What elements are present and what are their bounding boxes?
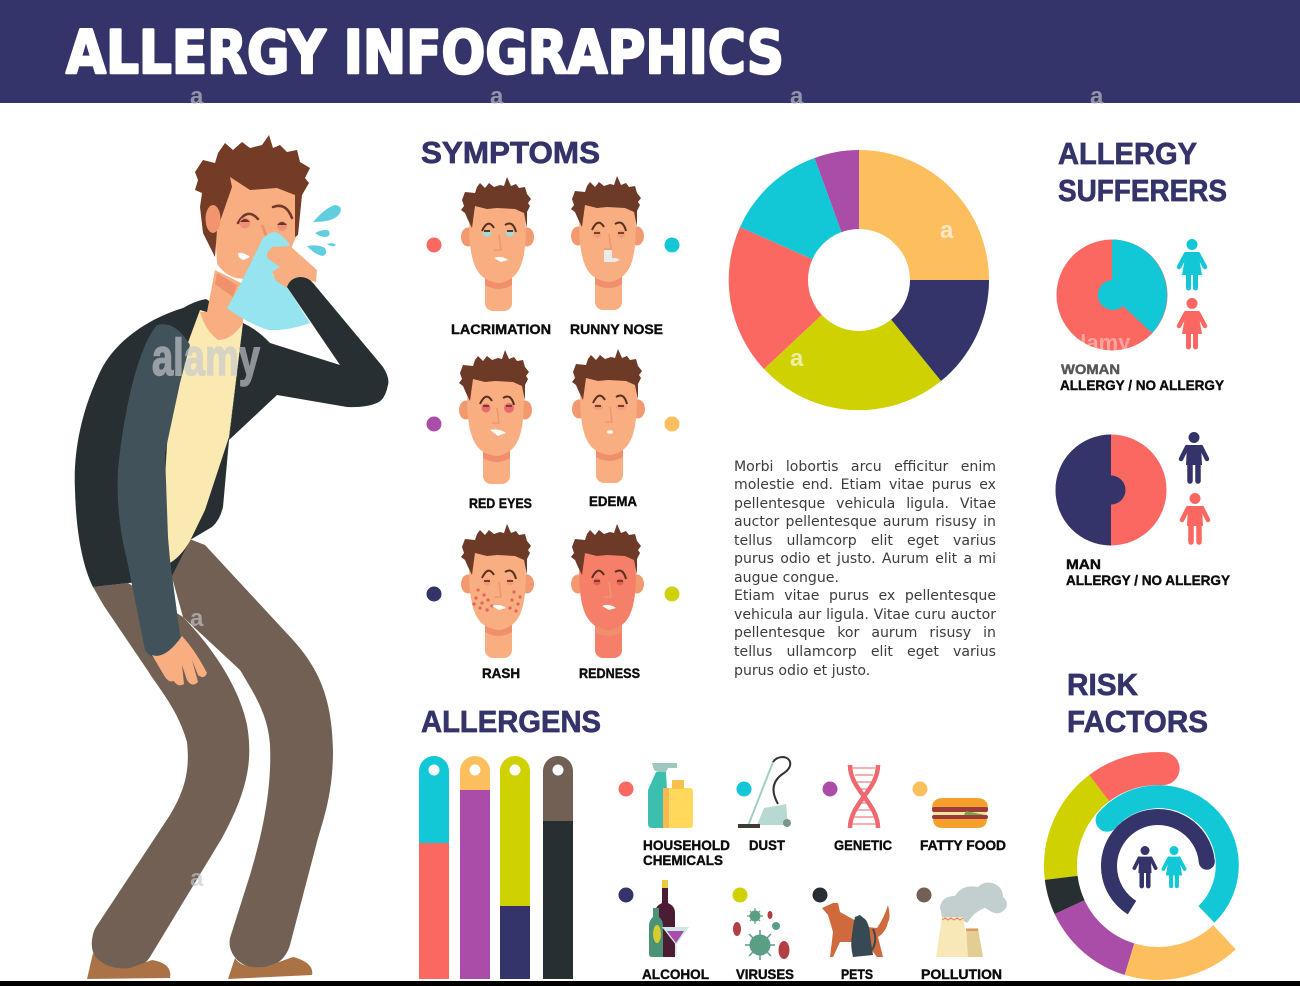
symptom: edema: EDEMA xyxy=(589,493,637,509)
risk factors people icon xyxy=(1134,846,1185,886)
body text paragraph: vehicula aur ligula. Vitae curu auctor xyxy=(734,607,996,623)
allergen: viruses xyxy=(732,888,794,982)
raised arm xyxy=(229,277,388,440)
watermark: a xyxy=(190,83,204,110)
allergen: household chemicals xyxy=(618,763,730,868)
allergy sufferers heading: ALLERGY xyxy=(1058,136,1197,171)
allergen: alcohol xyxy=(618,880,709,982)
symptom: lacrimation: LACRIMATION xyxy=(451,321,551,337)
body text paragraph: tellus ullamcorp elit eget varius xyxy=(734,644,996,660)
jacket body xyxy=(75,299,243,587)
symptom: lacrimation xyxy=(426,177,551,337)
allergen: genetic DNA: GENETIC xyxy=(834,837,892,853)
watermark: a xyxy=(790,83,804,110)
watermark: a xyxy=(940,217,954,244)
sneezing man illustration xyxy=(75,135,388,979)
symptom: red eyes xyxy=(426,350,532,511)
allergen: dust vacuum xyxy=(736,757,791,853)
allergen: pets xyxy=(812,888,890,982)
neck xyxy=(200,270,245,340)
title: ALLERGY INFOGRAPHICS xyxy=(66,18,784,88)
symptom: redness xyxy=(571,524,680,681)
watermark xyxy=(152,83,1104,892)
symptom: red eyes: RED EYES xyxy=(469,495,532,511)
allergy sufferers heading xyxy=(1058,136,1227,208)
body text paragraph: augue congue. xyxy=(734,570,839,586)
symptoms donut chart xyxy=(729,150,989,410)
symptom: edema xyxy=(572,349,680,509)
man figures xyxy=(1181,432,1208,542)
symptom: rash: RASH xyxy=(482,665,520,681)
watermark: alamy xyxy=(152,329,260,387)
body text paragraph: purus odio et justo. Aurum elit a mi xyxy=(734,551,996,567)
risk factors heading: FACTORS xyxy=(1067,704,1208,739)
allergen: fatty food burger: FATTY FOOD xyxy=(920,837,1006,853)
watermark: a xyxy=(490,83,504,110)
allergen: genetic DNA xyxy=(822,765,892,853)
allergen: dust vacuum: DUST xyxy=(749,837,785,853)
body text paragraph: purus odio et justo. xyxy=(734,663,870,679)
man pie label: ALLERGY / NO ALLERGY xyxy=(1066,572,1231,588)
lower hand xyxy=(152,636,207,685)
watermark: a xyxy=(190,605,204,632)
symptoms heading: SYMPTOMS xyxy=(421,135,600,170)
symptom: redness: REDNESS xyxy=(579,665,640,681)
symptom: runny nose xyxy=(570,176,680,337)
allergen: household chemicals: CHEMICALS xyxy=(643,852,723,868)
body text paragraph: tellus ullamcorp elit eget varius xyxy=(734,533,996,549)
body text paragraph: pellentesque vehicula ligula. Vitae xyxy=(734,496,996,512)
allergen: pollution: POLLUTION xyxy=(921,966,1002,982)
front leg xyxy=(168,538,333,968)
shirt xyxy=(165,310,243,564)
allergen: fatty food burger xyxy=(912,782,1006,853)
allergens stacked bars xyxy=(419,756,573,979)
allergen: viruses: VIRUSES xyxy=(736,966,794,982)
allergens heading: ALLERGENS xyxy=(421,704,601,739)
ear xyxy=(206,205,220,233)
man pie label xyxy=(1066,556,1231,588)
allergy sufferers heading: SUFFERERS xyxy=(1058,173,1227,208)
risk factors heading: RISK xyxy=(1067,667,1139,702)
symptom: rash xyxy=(426,524,534,681)
woman allergy pie xyxy=(1056,240,1168,355)
shoes xyxy=(87,953,312,979)
body text paragraph xyxy=(734,458,996,679)
woman pie label xyxy=(1060,361,1225,393)
woman allergy pie: alamy xyxy=(1068,330,1131,355)
woman figures xyxy=(1179,239,1205,347)
raised hand xyxy=(267,246,317,288)
header band xyxy=(0,0,1300,103)
allergen: pets: PETS xyxy=(841,966,873,982)
man allergy pie xyxy=(1056,434,1166,546)
symptom: runny nose: RUNNY NOSE xyxy=(570,321,663,337)
allergen: household chemicals: HOUSEHOLD xyxy=(643,837,730,853)
body text paragraph: Morbi lobortis arcu efficitur enim xyxy=(734,458,996,474)
jacket sleeve xyxy=(118,324,190,660)
eyes and mouth xyxy=(238,206,292,260)
risk factors ring chart xyxy=(1060,768,1227,963)
body text paragraph: auctor pellentesque aurum risusy in xyxy=(734,514,996,530)
watermark: a xyxy=(190,865,204,892)
body text paragraph: Etiam vitae purus ex pellentesque xyxy=(734,588,996,604)
hair xyxy=(195,135,310,257)
man pie label: MAN xyxy=(1066,556,1101,572)
woman pie label: WOMAN xyxy=(1061,361,1120,377)
back leg xyxy=(92,583,249,971)
face xyxy=(215,170,297,279)
watermark: a xyxy=(790,345,804,372)
risk factors heading xyxy=(1067,667,1208,739)
neck fold xyxy=(215,273,237,297)
watermark: a xyxy=(1090,83,1104,110)
allergen: alcohol: ALCOHOL xyxy=(642,966,709,982)
body text paragraph: molestie end. Etiam vitae purus ex xyxy=(734,477,996,493)
allergen: pollution xyxy=(916,883,1007,982)
tissue xyxy=(227,232,310,330)
woman pie label: ALLERGY / NO ALLERGY xyxy=(1060,377,1225,393)
body text paragraph: pellentesque kor aurum risusy in xyxy=(734,625,996,641)
bottom black strip xyxy=(0,981,1300,986)
sneeze droplets xyxy=(307,205,341,256)
